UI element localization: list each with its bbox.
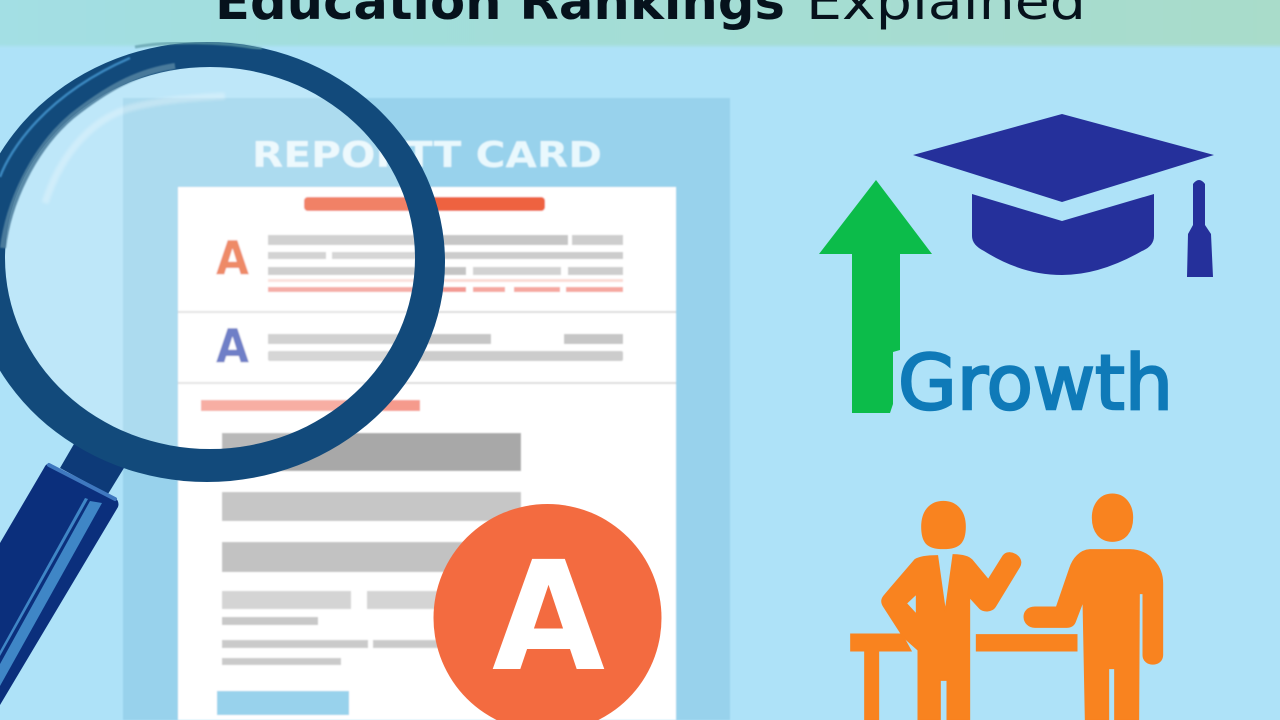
grade row one	[216, 231, 623, 292]
icon: graduation cap	[913, 114, 1214, 277]
title banner	[0, 0, 1280, 46]
grade row two: A	[216, 319, 249, 373]
blue button	[217, 691, 349, 715]
magnifier neck	[60, 425, 135, 494]
panel: report card	[123, 98, 730, 720]
woman	[882, 502, 1020, 720]
arrow: green growth arrow	[819, 180, 932, 413]
magnifier handle	[0, 464, 118, 705]
grade row one: A	[216, 231, 249, 285]
table	[851, 634, 1077, 720]
magnifier lens	[0, 60, 420, 460]
cap tassel	[1187, 180, 1213, 277]
grade A badge: A	[492, 529, 605, 705]
report card heading: REPORTT CARD	[252, 135, 602, 176]
grade A badge	[434, 504, 662, 720]
icon: magnifying glass	[0, 42, 445, 705]
icon: two people at a table	[851, 494, 1162, 720]
magnifier ring	[0, 42, 445, 482]
growth label: Growth	[898, 338, 1173, 427]
sheet title bar	[304, 197, 545, 211]
score blocks	[222, 433, 521, 665]
man	[1024, 494, 1162, 720]
report card sheet	[178, 187, 676, 720]
section bar	[201, 400, 420, 411]
grade row two	[216, 319, 623, 373]
